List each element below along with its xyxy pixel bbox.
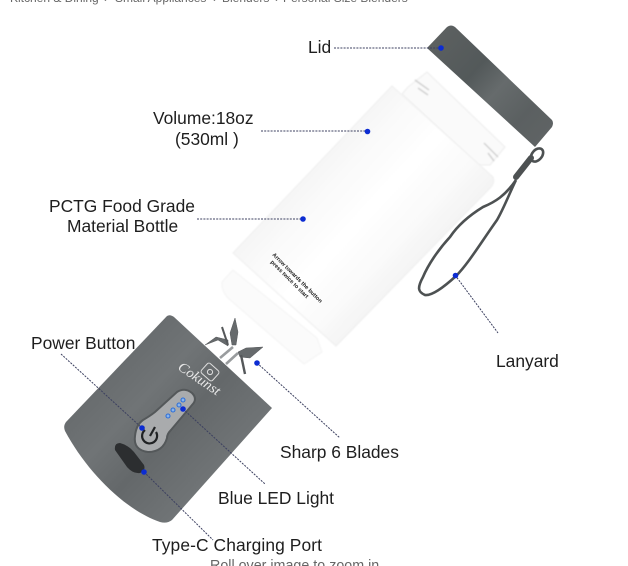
callout: volume: Volume:18oz xyxy=(153,108,254,128)
control panel xyxy=(135,390,195,452)
callout: lanyard: Lanyard xyxy=(496,351,559,371)
callout: lid: Lid xyxy=(308,37,331,57)
callout: bottle material: Material Bottle xyxy=(67,216,178,236)
callout: blades xyxy=(254,360,399,462)
callout: volume xyxy=(153,108,370,149)
bottle xyxy=(222,72,505,364)
LED indicators xyxy=(166,398,185,418)
callout: charging port xyxy=(141,469,322,555)
callout: volume: (530ml ) xyxy=(175,129,239,149)
callout: lid xyxy=(308,37,444,57)
callout: bottle material: PCTG Food Grade xyxy=(49,196,195,216)
lanyard xyxy=(419,146,546,295)
lid xyxy=(427,26,553,147)
callout: charging port: Type-C Charging Port xyxy=(152,535,322,555)
callout: lanyard xyxy=(453,273,559,371)
printed instruction on bottle: Arrow towards the button xyxy=(271,252,323,305)
printed instruction on bottle: press twice to start xyxy=(269,260,309,300)
callout: bottle material xyxy=(49,196,306,236)
brand logo: Cokunst xyxy=(175,360,224,400)
callout: power button: Power Button xyxy=(31,333,135,353)
charging port xyxy=(115,443,144,473)
blades xyxy=(205,318,263,374)
callout: power button xyxy=(31,333,145,431)
bottle neck threads xyxy=(402,72,505,165)
blender base xyxy=(64,315,272,523)
power icon xyxy=(142,427,157,443)
callout: LED light: Blue LED Light xyxy=(218,488,334,508)
base body xyxy=(64,315,272,523)
callout: LED light xyxy=(180,406,334,508)
bottle body xyxy=(233,86,494,346)
callout: blades: Sharp 6 Blades xyxy=(280,442,399,462)
camera-style icon xyxy=(200,362,220,382)
bottle lower neck xyxy=(222,270,322,364)
